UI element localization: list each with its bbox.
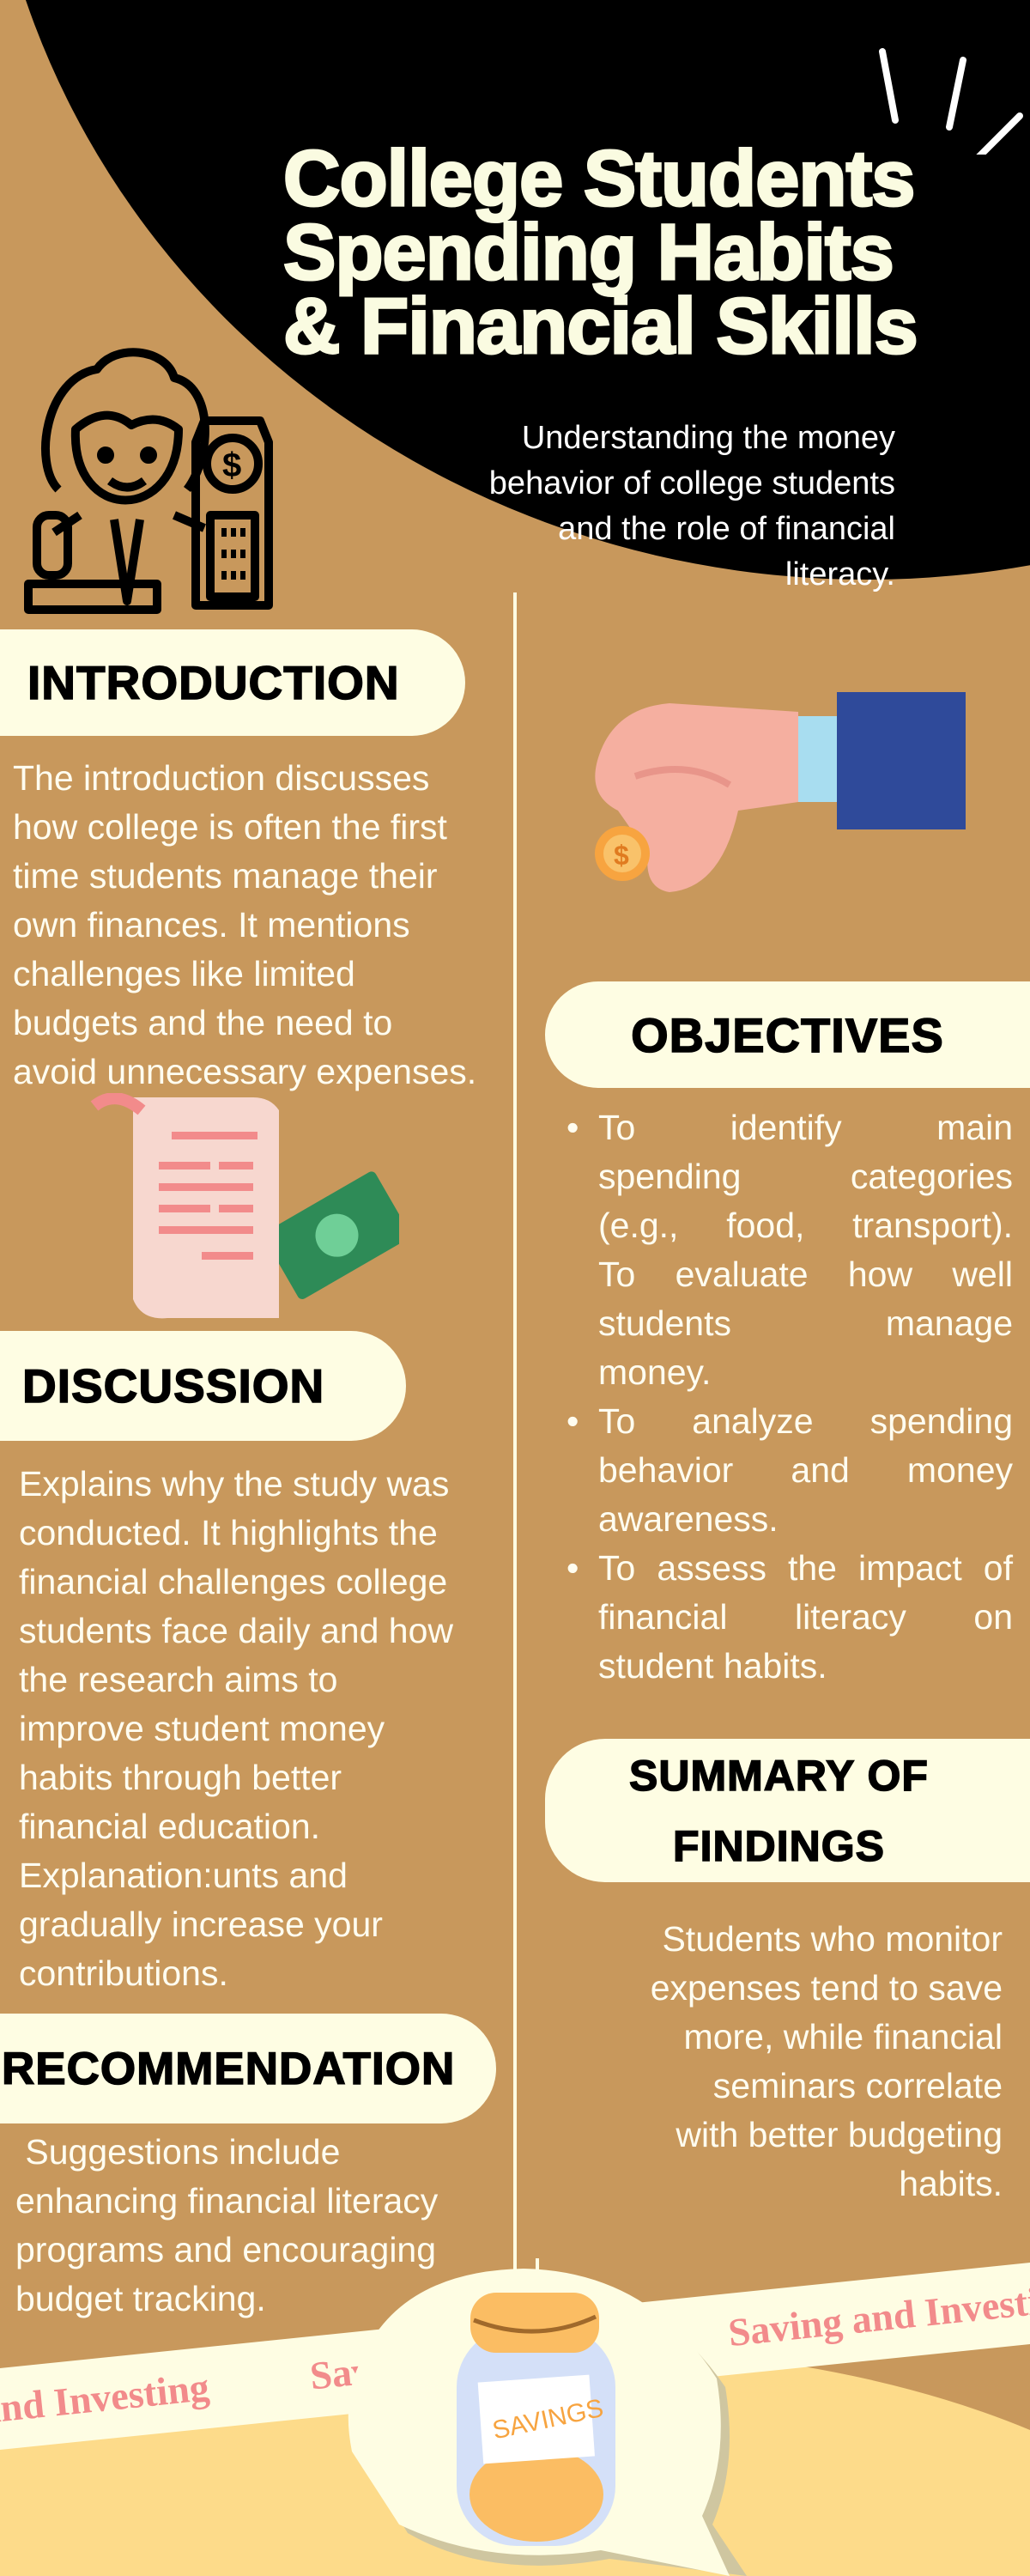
panel: recommendation heading: RECOMMENDATION [2, 2044, 455, 2093]
introduction text: budgets and the need to [13, 1003, 392, 1042]
title: & Financial Skills [283, 283, 918, 370]
objectives list: To identify main [598, 1108, 1013, 1147]
discussion text: improve student money [19, 1709, 385, 1748]
summary text: expenses tend to save [651, 1968, 1003, 2008]
objectives list: financial literacy on [598, 1597, 1013, 1637]
discussion text: students face daily and how [19, 1611, 453, 1650]
objectives list: (e.g., food, transport). [598, 1206, 1013, 1245]
objectives list: • [566, 1108, 579, 1147]
subtitle: literacy. [785, 556, 895, 592]
summary text: with better budgeting [676, 2115, 1003, 2154]
objectives list: To assess the impact of [598, 1548, 1013, 1588]
discussion text: conducted. It highlights the [19, 1513, 438, 1552]
speech bubble with savings jar [348, 2258, 747, 2576]
recommendation text: enhancing financial literacy [15, 2181, 438, 2221]
objectives list: behavior and money [598, 1450, 1013, 1490]
discussion text: financial challenges college [19, 1562, 447, 1601]
title: Spending Habits [283, 209, 894, 296]
subtitle: and the role of financial [558, 511, 895, 547]
discussion text: Explains why the study was [19, 1464, 449, 1504]
panel: introduction heading: INTRODUCTION [27, 656, 400, 709]
recommendation text: budget tracking. [15, 2279, 266, 2318]
recommendation text: Suggestions include [25, 2132, 340, 2172]
discussion text: the research aims to [19, 1660, 337, 1699]
objectives list: • [566, 1401, 579, 1441]
icon: hand with coin [595, 692, 966, 892]
summary text: more, while financial [684, 2017, 1003, 2057]
panel: objectives heading: OBJECTIVES [631, 1008, 944, 1061]
objectives list: students manage [598, 1303, 1013, 1343]
subtitle: behavior of college students [489, 465, 895, 501]
panel: objectives heading [545, 981, 1030, 1088]
introduction text: time students manage their [13, 856, 438, 896]
title [283, 135, 918, 370]
subtitle: Understanding the money [522, 420, 895, 456]
panel: discussion heading: DISCUSSION [22, 1359, 324, 1413]
panel: discussion heading [0, 1331, 406, 1441]
introduction text: challenges like limited [13, 954, 355, 993]
recommendation text: programs and encouraging [15, 2230, 436, 2269]
decorative sparkle strokes [879, 48, 1023, 155]
panel: summary of findings heading [545, 1739, 1030, 1882]
introduction text: own finances. It mentions [13, 905, 410, 945]
objectives list: money. [598, 1352, 711, 1392]
discussion text: habits through better [19, 1758, 342, 1797]
panel: introduction heading [0, 629, 465, 736]
panel: summary of findings heading: SUMMARY OF [629, 1752, 929, 1800]
introduction text [13, 758, 476, 1091]
recommendation text [15, 2132, 438, 2318]
discussion text: Explanation:unts and [19, 1856, 348, 1895]
subtitle [489, 420, 895, 592]
discussion text [19, 1464, 453, 1993]
banner: saving and investing [0, 2275, 1030, 2445]
discussion text: gradually increase your [19, 1905, 383, 1944]
panel: recommendation heading [0, 2014, 496, 2123]
objectives list [566, 1108, 1013, 1686]
icon: student with calculator [24, 348, 273, 614]
introduction text: The introduction discusses [13, 758, 429, 798]
summary text: habits. [899, 2164, 1003, 2203]
objectives list: spending categories [598, 1157, 1013, 1196]
icon: receipt and money [91, 1093, 399, 1319]
banner: saving and investing: Saving and Investing [308, 2318, 663, 2398]
panel: summary of findings heading: FINDINGS [673, 1822, 885, 1870]
objectives list: student habits. [598, 1646, 827, 1686]
objectives list: To evaluate how well [598, 1255, 1013, 1294]
icon: student with calculator: $ [222, 447, 241, 484]
summary text: seminars correlate [713, 2066, 1003, 2105]
objectives list: • [566, 1548, 579, 1588]
introduction text: how college is often the first [13, 807, 447, 847]
introduction text: avoid unnecessary expenses. [13, 1052, 476, 1091]
jar [457, 2327, 615, 2546]
discussion text: contributions. [19, 1953, 228, 1993]
title: College Students [283, 135, 914, 222]
objectives list: awareness. [598, 1499, 779, 1539]
summary text: Students who monitor [662, 1919, 1003, 1959]
discussion text: financial education. [19, 1807, 320, 1846]
icon: hand with coin: $ [614, 840, 629, 871]
summary text [651, 1919, 1003, 2203]
objectives list: To analyze spending [598, 1401, 1013, 1441]
speech bubble with savings jar: SAVINGS [490, 2394, 606, 2445]
